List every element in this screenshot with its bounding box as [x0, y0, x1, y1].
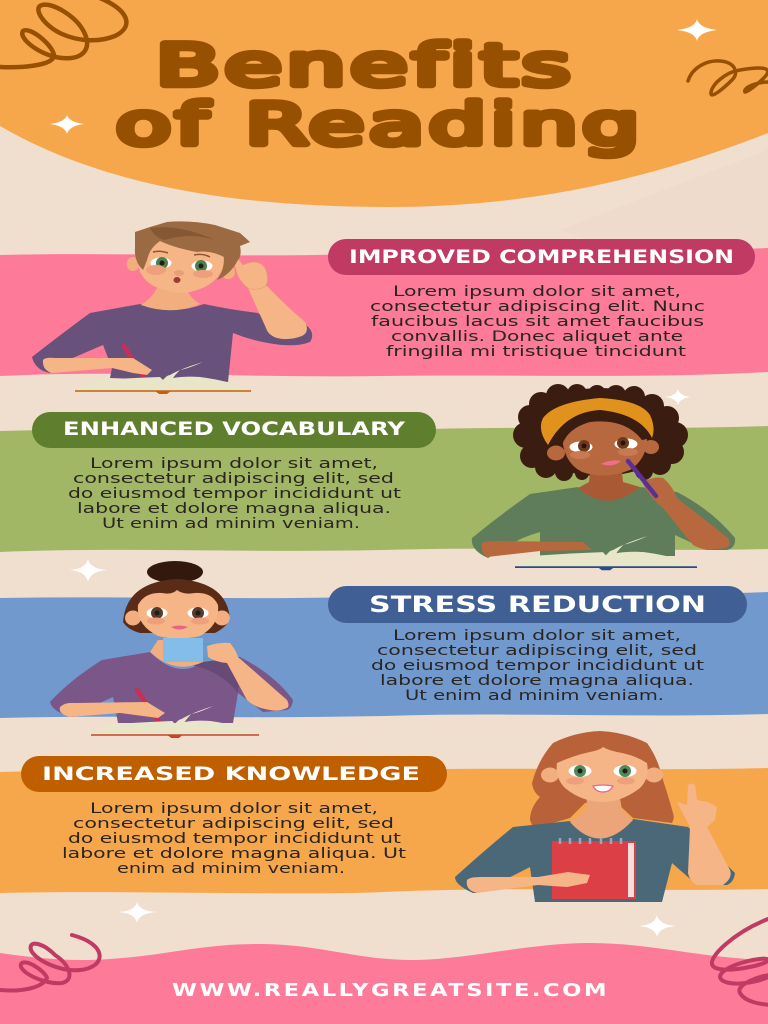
- neck: [150, 640, 203, 667]
- panel: enhanced vocabulary: [32, 412, 436, 532]
- sparkle: [50, 115, 84, 134]
- body text: labore et dolore magna aliqua. Ut: [62, 846, 407, 862]
- heading pill: INCREASED KNOWLEDGE: [42, 763, 420, 785]
- neck: [570, 798, 633, 839]
- hair streak: [150, 227, 215, 240]
- forearm: [43, 358, 152, 375]
- panel: stress reduction: [328, 586, 747, 704]
- character: woman with mug: [50, 561, 293, 738]
- body text: labore et dolore magna aliqua.: [77, 501, 391, 517]
- heading pill: [328, 239, 755, 275]
- hair: [135, 221, 250, 280]
- body text: Lorem ipsum dolor sit amet,: [393, 284, 681, 300]
- eye: [570, 440, 592, 452]
- sparkle: [677, 19, 717, 41]
- face: [138, 590, 218, 638]
- raised arm and hand: [677, 784, 731, 885]
- body text: [68, 456, 402, 532]
- body text: labore et dolore magna aliqua.: [380, 673, 694, 689]
- shirt: [472, 487, 735, 558]
- face: [562, 416, 647, 476]
- body text: do eiusmod tempor incididunt ut: [68, 831, 402, 847]
- forearm: [60, 702, 165, 718]
- squiggle: top right: [688, 61, 768, 95]
- body text: convallis. Donec aliquet ante: [391, 329, 683, 345]
- sparkle: [638, 915, 677, 937]
- sparkle: [118, 902, 157, 923]
- blush: [146, 265, 213, 278]
- mug: [163, 638, 218, 662]
- forearm: [482, 541, 592, 557]
- body text: Ut enim ad minim veniam.: [405, 688, 664, 704]
- body text: [370, 284, 705, 360]
- raised arm: [207, 643, 288, 711]
- raised hand: [231, 254, 268, 289]
- body text: consectetur adipiscing elit, sed: [73, 816, 394, 832]
- body text: consectetur adipiscing elit. Nunc: [370, 299, 705, 315]
- squiggle: top left: [0, 0, 126, 67]
- sparkle: [665, 389, 691, 405]
- pen: [628, 461, 656, 496]
- shirt: [455, 819, 735, 902]
- eye: [150, 257, 172, 269]
- notebook: [552, 838, 636, 899]
- eye: [146, 607, 168, 619]
- shirt shade: [190, 657, 240, 693]
- hair bun: [147, 561, 203, 583]
- face: [138, 238, 224, 293]
- ear: [643, 440, 659, 454]
- squiggle: bottom left: [0, 935, 100, 990]
- blush: [566, 778, 635, 785]
- face: [557, 747, 648, 802]
- shirt: [32, 304, 312, 382]
- ear: [547, 446, 565, 460]
- body text: do eiusmod tempor incididunt ut: [68, 486, 402, 502]
- lips: [601, 460, 621, 465]
- raised arm: [248, 286, 307, 339]
- hair: [530, 731, 674, 848]
- band: blue: [0, 592, 768, 718]
- body text: Lorem ipsum dolor sit amet,: [90, 456, 378, 472]
- sparkle: [69, 559, 108, 582]
- ear: [221, 265, 235, 279]
- blush: [570, 448, 638, 459]
- character: boy with book: [32, 221, 312, 394]
- body text: enim ad minim veniam.: [117, 861, 345, 877]
- ear: [214, 610, 230, 626]
- mouth: [174, 277, 180, 283]
- mouth: [593, 785, 613, 792]
- panel: increased knowledge: [21, 756, 447, 877]
- curly hair: [513, 384, 688, 481]
- eye: [192, 260, 212, 272]
- band: orange: [0, 768, 768, 893]
- raised arm: [642, 478, 730, 550]
- heading pill: STRESS REDUCTION: [369, 593, 706, 618]
- eye: [188, 607, 208, 619]
- title: Benefits: [156, 33, 575, 99]
- band: green: [0, 426, 768, 552]
- header orange arc: [0, 0, 768, 207]
- body text: faucibus lacus sit amet faucibus: [371, 314, 704, 330]
- band: footer pink: [0, 943, 768, 1024]
- body text: [62, 801, 407, 877]
- ear: [126, 257, 140, 271]
- neck: [141, 288, 200, 310]
- character: woman with notebook: [455, 731, 735, 902]
- hair: [123, 579, 230, 633]
- title: of Reading: [116, 92, 644, 158]
- shirt: [50, 652, 293, 723]
- body text: Ut enim ad minim veniam.: [102, 516, 360, 532]
- book: [91, 706, 259, 738]
- pen: [124, 346, 146, 381]
- body text: consectetur adipiscing elit, sed: [377, 643, 697, 659]
- body text: fringilla mi tristique tincidunt: [386, 344, 687, 360]
- heading pill: [32, 412, 436, 448]
- ear: [645, 768, 663, 782]
- book: [515, 536, 697, 570]
- title: [116, 33, 644, 158]
- heading pill: ENHANCED VOCABULARY: [63, 418, 405, 440]
- headband: [541, 398, 654, 445]
- pen: [137, 690, 160, 723]
- book: [75, 362, 251, 394]
- heading pill: [328, 586, 747, 623]
- nose: [174, 270, 184, 276]
- body text: do eiusmod tempor incididunt ut: [371, 658, 705, 674]
- body text: consectetur adipiscing elit, sed: [73, 471, 394, 487]
- hair top: [552, 410, 652, 445]
- band: pink: [0, 248, 768, 376]
- squiggle: bottom right: [712, 919, 768, 1005]
- panel: improved comprehension: [328, 239, 755, 360]
- ear: [541, 768, 559, 782]
- character: curly hair woman: [472, 384, 735, 570]
- body text: [371, 628, 705, 704]
- heading pill: [21, 756, 447, 792]
- eye: [614, 765, 636, 777]
- heading pill: IMPROVED COMPREHENSION: [349, 246, 734, 268]
- eye: [568, 765, 592, 777]
- footer website: WWW.REALLYGREATSITE.COM: [172, 980, 609, 1001]
- body text: Lorem ipsum dolor sit amet,: [90, 801, 378, 817]
- blush: [147, 618, 209, 624]
- neck: [578, 472, 640, 501]
- lips: [171, 626, 188, 630]
- eye: [614, 437, 638, 450]
- brows: [153, 251, 210, 257]
- forearm: [467, 872, 590, 893]
- body text: Lorem ipsum dolor sit amet,: [393, 628, 681, 644]
- ear: [125, 610, 141, 626]
